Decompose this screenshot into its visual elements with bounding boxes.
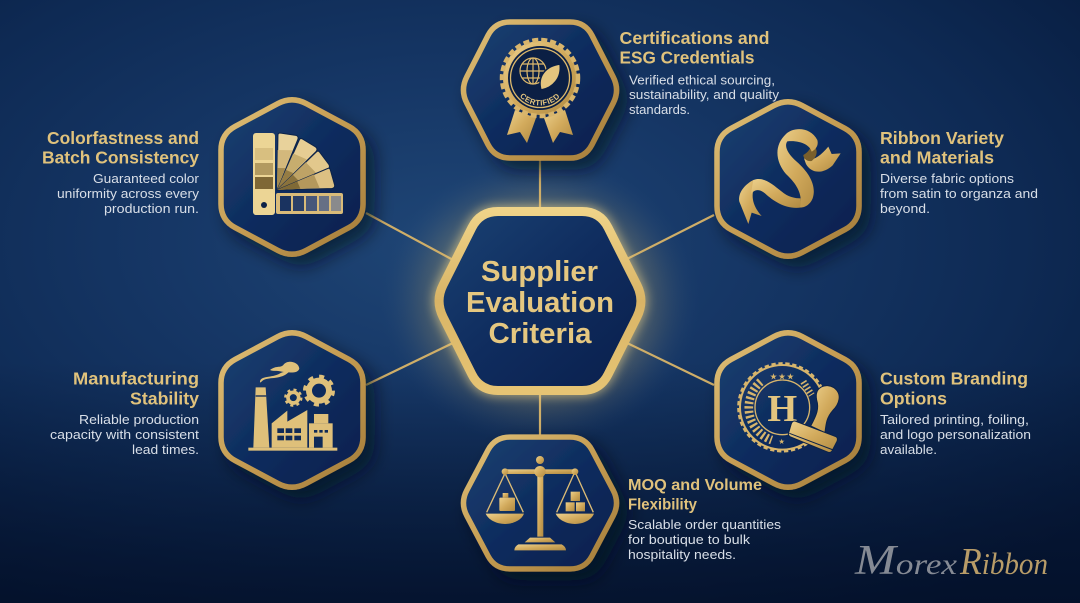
description: available. [880, 442, 937, 457]
description: lead times. [132, 442, 199, 457]
description: Guaranteed color [93, 171, 200, 186]
brand logo: Ribbon [959, 541, 1048, 583]
icon: ribbon [739, 129, 841, 224]
brand logo [854, 538, 1048, 584]
description [57, 171, 200, 216]
description: uniformity across every [57, 186, 200, 201]
title: Supplier [481, 256, 598, 288]
description [50, 412, 199, 457]
panel: manufacturing stability [50, 333, 363, 487]
brand logo: Morex [854, 538, 958, 584]
icon: factory and gears [248, 362, 337, 451]
panel: central hub [439, 212, 641, 390]
hexagon frame [463, 437, 617, 569]
hub hexagon [439, 212, 641, 390]
description [628, 517, 782, 562]
description: Diverse fabric options [880, 171, 1015, 186]
panel: colorfastness [42, 100, 363, 254]
heading: MOQ and Volume [628, 477, 762, 494]
description [880, 171, 1038, 216]
hexagon frame [463, 22, 617, 158]
title: Criteria [488, 318, 593, 350]
heading line 2: and Materials [880, 148, 994, 168]
heading line 2: Stability [130, 388, 199, 408]
description: beyond. [880, 201, 930, 216]
hexagon frame [221, 100, 363, 254]
icon: certified rosette [500, 38, 580, 143]
description [629, 72, 780, 117]
description: and logo personalization [880, 427, 1031, 442]
heading: Colorfastness and [47, 128, 199, 148]
icon: balance scale [486, 456, 594, 550]
heading line 2: ESG Credentials [620, 48, 755, 68]
icon: colour swatch fan [253, 133, 343, 215]
heading line 2: Batch Consistency [42, 148, 199, 168]
description: Scalable order quantities [628, 517, 782, 532]
hexagon frame [717, 333, 859, 487]
description: Reliable production [79, 412, 199, 427]
description [880, 412, 1031, 457]
hexagon frame [717, 102, 859, 256]
description: hospitality needs. [628, 547, 736, 562]
title: Evaluation [466, 287, 614, 319]
description: Tailored printing, foiling, [880, 412, 1029, 427]
description: from satin to organza and [880, 186, 1038, 201]
description: capacity with consistent [50, 427, 199, 442]
description: Verified ethical sourcing, [629, 72, 775, 88]
panel: ribbon variety [717, 102, 1038, 256]
icon: crest and stamp: H [767, 388, 797, 430]
panel: certifications [460, 18, 780, 183]
title [466, 256, 614, 350]
description: production run. [104, 201, 199, 216]
icon: crest and stamp [738, 363, 839, 452]
heading: Ribbon Variety [880, 128, 1004, 148]
connector lines [366, 160, 714, 435]
icon: crest and stamp: ★★★ [770, 372, 795, 382]
icon: crest and stamp: ★ [778, 437, 785, 446]
panel: custom branding [717, 333, 1031, 487]
description: sustainability, and quality [629, 87, 780, 102]
icon: certified rosette: CERTIFIED [520, 94, 559, 106]
heading: Manufacturing [73, 368, 199, 388]
heading: Custom Branding [880, 368, 1028, 388]
panel: moq and volume [463, 437, 782, 569]
description: standards. [629, 102, 690, 117]
hexagon frame [221, 333, 363, 487]
description: for boutique to bulk [628, 532, 751, 547]
heading line 2: Flexibility [628, 496, 697, 514]
heading: Certifications and [620, 28, 770, 48]
center glow [380, 156, 700, 446]
hub hexagon glow [439, 212, 641, 390]
heading line 2: Options [880, 388, 947, 408]
